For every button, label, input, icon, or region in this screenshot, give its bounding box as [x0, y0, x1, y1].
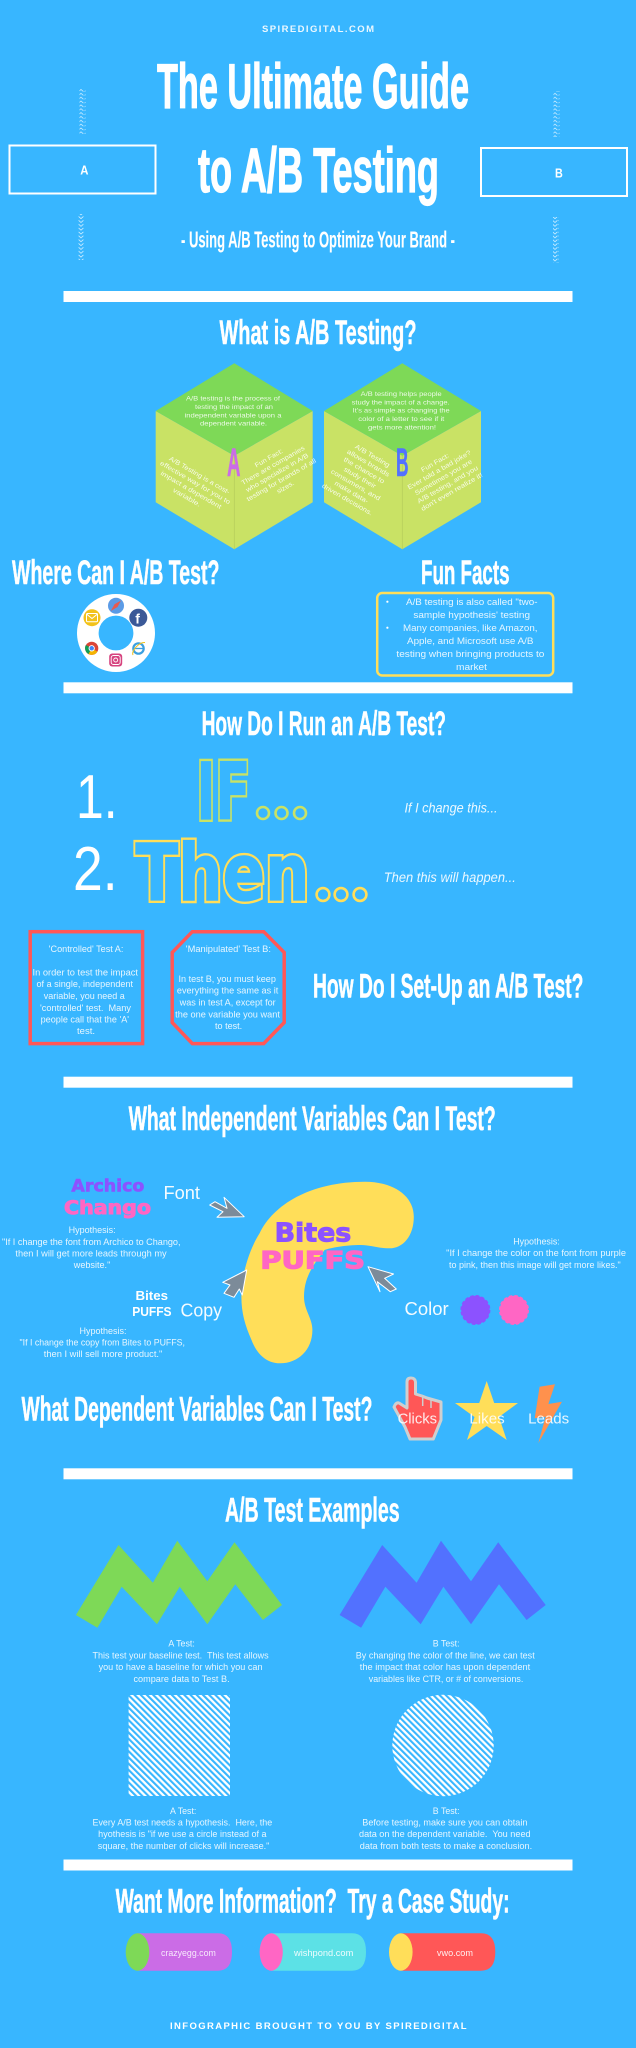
heading: fun facts: Fun Facts — [421, 554, 510, 592]
divider — [64, 291, 572, 302]
panel: controlled test A: people call that the 'A' — [41, 1014, 129, 1024]
cube B left text: allows brands — [345, 449, 391, 479]
blob text: bites puffs: Bites — [275, 1219, 351, 1249]
cube A top text: testing the impact of an — [195, 404, 273, 411]
panel: manipulated test B: everything the same as it — [177, 986, 279, 996]
zigzag: green — [76, 1541, 282, 1628]
cube B left text: driven decisions. — [321, 483, 374, 517]
fun facts box — [377, 593, 553, 676]
cylinder: crazyegg: crazyegg.com — [161, 1948, 216, 1959]
cube A — [150, 363, 322, 549]
example text: A shape — [92, 1806, 272, 1851]
icon: star — [455, 1381, 518, 1440]
cube A top text: A/B testing is the process of — [186, 396, 280, 403]
cube B — [321, 363, 485, 549]
label: font: Font — [164, 1183, 200, 1203]
color hypothesis: Hypothesis: — [513, 1236, 560, 1246]
blob text: bites puffs — [260, 1219, 365, 1274]
box B with chevrons — [481, 91, 627, 263]
panel: manipulated test B: was in test A, except for — [179, 998, 276, 1008]
fun facts box: Apple, and Microsoft use A/B — [407, 636, 534, 646]
cube A right text: There are companies — [240, 444, 307, 487]
icon: lightning bolt — [535, 1384, 562, 1443]
cube A left text — [150, 453, 236, 521]
box A with chevrons: A — [80, 162, 89, 177]
panel: manipulated test B: the one variable you want — [175, 1009, 280, 1019]
example text: B line: the impact that color has upon dependent — [360, 1662, 531, 1672]
font samples — [64, 1177, 151, 1219]
cube A right text: testing for brands of all — [246, 457, 318, 503]
copy hypothesis: Hypothesis: — [80, 1326, 126, 1336]
cube A left text: A/B Testing is a cost- — [168, 455, 231, 496]
cylinder: wishpond — [260, 1933, 366, 1971]
example text: A shape: hyothesis is "if we use a circle instead of a — [98, 1829, 266, 1839]
color hypothesis: to pink, then this image will get more likes." — [449, 1260, 621, 1270]
heading: dependent variables: What Dependent Variables Can I Test? — [22, 1391, 372, 1429]
cylinder: crazyegg — [126, 1933, 232, 1971]
cube B left text: make data- — [333, 480, 369, 505]
font hypothesis — [2, 1225, 180, 1270]
hatched square — [129, 1695, 230, 1796]
arrow: font — [210, 1197, 244, 1217]
icon: chrome — [85, 642, 98, 655]
hatched circle — [392, 1695, 494, 1796]
panel: manipulated test B: 'Manipulated' Test B: — [186, 944, 271, 954]
example text: B shape: data from both tests to make a conclusion. — [360, 1841, 532, 1851]
label: likes: Likes — [469, 1410, 505, 1427]
example text: B shape: B Test: — [433, 1806, 460, 1816]
heading: where can I test: Where Can I A/B Test? — [12, 554, 220, 592]
label: clicks: Clicks — [398, 1410, 437, 1427]
panel: manipulated test B — [172, 932, 284, 1044]
font samples: Archico — [71, 1177, 144, 1197]
copy sample: Bites — [136, 1289, 168, 1303]
cube B right text: A/B testing, and you — [416, 465, 480, 505]
color swatch: pink — [500, 1296, 528, 1324]
site name: SPIREDIGITAL.COM — [262, 24, 374, 35]
example text: A line: This test your baseline test. This test allows — [92, 1650, 269, 1660]
icon: facebook: f — [135, 610, 140, 626]
example text: B shape — [359, 1806, 532, 1851]
title — [157, 52, 469, 206]
box B with chevrons: B — [555, 165, 563, 180]
panel: controlled test A: test. — [77, 1026, 95, 1036]
panel: controlled test A: 'controlled' test. Many — [40, 1003, 132, 1013]
example text: B line: B Test: — [433, 1638, 460, 1648]
cube A top text: dependent variable. — [200, 421, 267, 428]
panel: controlled test A: of a single, independent — [36, 979, 134, 989]
cube A right text: Fun Fact: — [254, 448, 284, 469]
copy hypothesis — [20, 1326, 185, 1359]
color swatch: purple — [461, 1296, 490, 1324]
cube B right text: Ever told a bad joke? — [407, 449, 473, 492]
cube A right text: sizes. — [276, 480, 296, 496]
color hypothesis: "If I change the color on the font from purple — [446, 1248, 626, 1258]
panel: manipulated test B: In test B, you must keep — [178, 974, 276, 984]
step 2 number: 2. — [73, 835, 118, 904]
blob text: bites puffs: PUFFS — [260, 1246, 365, 1274]
example text: B shape: Before testing, make sure you can obtain — [362, 1818, 527, 1828]
fun facts box: testing when bringing products to — [396, 649, 544, 659]
divider — [64, 1468, 572, 1479]
color hypothesis — [446, 1236, 626, 1270]
cube B left text: study their — [342, 466, 378, 491]
example text: B shape: data on the dependent variable. You need — [359, 1829, 531, 1839]
cube A top text: independent variable upon a — [184, 412, 282, 419]
cube B top text: A/B testing helps people — [361, 391, 442, 398]
yellow blob — [241, 1182, 414, 1363]
font hypothesis: then I will get more leads through my — [15, 1248, 167, 1258]
heading: how do I run: How Do I Run an A/B Test? — [202, 705, 446, 743]
cube B left text: consumers, and — [329, 468, 382, 503]
label: leads: Leads — [528, 1410, 569, 1427]
divider — [64, 682, 572, 693]
cube B right text: Sometimes you are — [414, 458, 474, 497]
title: to A/B Testing — [198, 136, 439, 206]
footer: INFOGRAPHIC BROUGHT TO YOU BY SPIREDIGITAL — [170, 2021, 467, 2032]
copy hypothesis: then I will sell more product." — [44, 1349, 162, 1359]
panel: controlled test A: In order to test the impact — [32, 968, 139, 978]
divider — [64, 1077, 572, 1088]
channel icon ring — [77, 594, 155, 672]
arrow: copy — [223, 1270, 247, 1297]
box A with chevrons — [10, 88, 156, 260]
step 1 number: 1. — [76, 763, 118, 832]
step 2 Then outlined: Then — [136, 829, 310, 919]
cube B left text — [321, 439, 399, 517]
font hypothesis: Hypothesis: — [69, 1225, 116, 1235]
cube B: B — [396, 441, 408, 485]
panel: manipulated test B: to test. — [215, 1021, 242, 1031]
cube A left text: variable. — [171, 487, 202, 509]
example text: A line: you to have a baseline for which you can — [99, 1662, 262, 1672]
step 2 Then outlined: Then — [136, 829, 310, 919]
copy sample — [132, 1289, 172, 1319]
heading: what is A/B testing: What is A/B Testing? — [220, 314, 416, 352]
step 1 IF outlined: IF — [196, 748, 250, 838]
cube B left text: the chance to — [342, 456, 386, 486]
cube A left text: impact a dependent — [159, 470, 223, 511]
label: color: Color — [404, 1299, 449, 1319]
cube B left text: A/B Testing — [354, 444, 391, 469]
cube B top text: color of a letter to see if it — [358, 416, 444, 423]
cube B top text: It's as simple as changing the — [353, 408, 450, 415]
cylinder: wishpond: wishpond.com — [293, 1948, 353, 1959]
cube A: A — [227, 441, 240, 485]
panel: controlled test A — [30, 932, 143, 1044]
fun facts box: Many companies, like Amazon, — [403, 623, 538, 633]
cube B right text: don't even realize it! — [420, 472, 484, 513]
step 1 caption: If I change this... — [404, 801, 498, 816]
step 1 IF outlined: IF — [196, 748, 250, 838]
zigzag: blue — [340, 1541, 546, 1628]
cube B top text: gets more attention! — [368, 424, 436, 431]
example text: B line: variables like CTR, or # of conversions. — [369, 1674, 523, 1684]
step 2 caption: Then this will happen... — [384, 870, 516, 885]
cube B right text — [402, 442, 485, 513]
fun facts box: A/B testing is also called "two- — [406, 597, 538, 607]
icon: mail — [84, 609, 100, 626]
icon: instagram — [109, 654, 122, 666]
copy hypothesis: "If I change the copy from Bites to PUFFS, — [20, 1338, 185, 1348]
cylinder: vwo: vwo.com — [437, 1948, 473, 1959]
icon: internet explorer — [133, 642, 145, 655]
example text: B line: By changing the color of the line, we can test — [356, 1650, 535, 1660]
example text: A line — [92, 1638, 269, 1684]
cube B right text: Fun Fact: — [420, 452, 451, 474]
cube A right text — [233, 436, 322, 511]
panel: controlled test A: variable, you need a — [44, 991, 125, 1001]
example text: A shape: Every A/B test needs a hypothesis. Here, the — [92, 1818, 272, 1828]
icon: safari — [108, 598, 124, 614]
cylinder: vwo — [389, 1933, 495, 1971]
label: copy: Copy — [180, 1301, 222, 1321]
icon: pointing hand — [394, 1378, 441, 1439]
divider — [64, 1860, 572, 1870]
font samples: Chango — [64, 1197, 151, 1219]
cube A right text: who specialize in A/B — [244, 452, 311, 495]
heading: test examples: A/B Test Examples — [225, 1492, 400, 1530]
fun facts box: sample hypothesis' testing — [413, 610, 530, 620]
example text: A shape: A Test: — [170, 1806, 196, 1816]
arrow: color — [368, 1267, 396, 1292]
font hypothesis: website." — [73, 1260, 110, 1270]
panel: controlled test A: 'Controlled' Test A: — [49, 944, 123, 954]
cube B top text: study the impact of a change. — [352, 399, 450, 406]
example text: A shape: square, the number of clicks will increase." — [98, 1841, 269, 1851]
example text: A line: A Test: — [168, 1638, 195, 1648]
example text: A line: compare data to Test B. — [134, 1674, 230, 1684]
font hypothesis: "If I change the font from Archico to Chango, — [2, 1237, 180, 1247]
fun facts box: market — [456, 662, 488, 672]
cube A left text: effective way for you to — [159, 460, 232, 506]
cube A top text — [184, 396, 282, 428]
copy sample: PUFFS — [132, 1305, 172, 1319]
cube B top text — [352, 391, 450, 431]
example text: B line — [356, 1638, 535, 1684]
